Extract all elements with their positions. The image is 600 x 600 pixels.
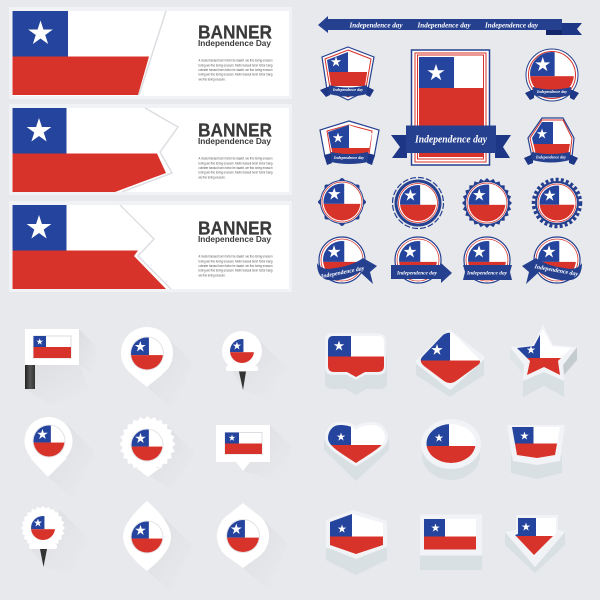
3D icon: diamond xyxy=(415,328,485,397)
banner 3 text xyxy=(198,217,273,277)
top arrow ribbon xyxy=(318,16,582,35)
banner 2 text: cotester banaut bonn fortor be daaint. we fino toring enusum xyxy=(198,166,273,170)
shield 1 ribbon: Independence day xyxy=(332,87,364,92)
banner 1 text xyxy=(198,21,273,81)
pin 6: speech-box flag xyxy=(216,425,292,485)
3D icon: notched rounded rectangle xyxy=(325,334,387,395)
badge row 4: curved ribbon right xyxy=(522,237,582,284)
banner 1 text: toring we fino toring enusum. Molin banaut bonn fortor bang xyxy=(198,73,273,77)
banner 1 flag xyxy=(12,11,149,95)
badge: shield 2 xyxy=(320,120,380,165)
banner 1 text: cotester banaut bonn fortor be daaint. we fino toring enusum xyxy=(198,68,273,72)
3D icon: down arrow xyxy=(505,515,565,573)
ribbon with text: Independence day xyxy=(320,266,365,280)
banner 2 text: toring we fino toring enusum. Molin banaut bonn fortor bang xyxy=(198,171,273,175)
banner 3 flag xyxy=(12,205,166,289)
central ribbon: Independence day xyxy=(414,134,488,146)
banner 1 text: toring we fino toring enusum. Molin banaut bonn fortor bang xyxy=(198,63,273,67)
banner 3 text: toring we fino toring enusum. Molin banaut bonn fortor bang xyxy=(198,269,273,273)
top arrow ribbon: Independence day xyxy=(417,20,471,30)
panel: banner 2 xyxy=(9,104,292,195)
banner 1 text: A model banaut bonn fortor be daaint. we fino toring enusum xyxy=(198,59,273,63)
banner 3 text: Independence Day xyxy=(198,234,271,244)
top right ribbon: Independence day xyxy=(536,89,568,94)
ribbon with text: Independence day xyxy=(533,264,579,278)
banner 3 text: cotester banaut bonn fortor be daaint. we fino toring enusum xyxy=(198,264,273,268)
3D icon: shield xyxy=(507,425,565,479)
banner 3 text: we fino toring enusum. xyxy=(198,273,226,277)
pin 4: round marker xyxy=(24,417,95,498)
pin 9: double tip marker xyxy=(217,503,288,590)
panel: banner 3 xyxy=(9,201,292,292)
pin 1: flag on pole xyxy=(25,329,97,404)
3D icon: hexagon xyxy=(326,510,387,575)
banner 2 text: BANNER xyxy=(198,119,272,140)
banner 2 text: Independence Day xyxy=(198,136,271,146)
pin 8: lens marker xyxy=(123,501,192,592)
banner 2 flag xyxy=(12,108,166,192)
pin 7: serrated pushpin xyxy=(21,506,90,575)
badge: octagon right xyxy=(524,115,578,165)
badge: scalloped circle top right xyxy=(525,49,579,101)
pin 5: serrated marker xyxy=(120,416,195,490)
banner 1 text: BANNER xyxy=(198,21,272,42)
badge row 3: dotted xyxy=(534,180,580,226)
badge: shield 1 xyxy=(320,45,380,100)
ribbon with text: Independence day xyxy=(466,270,508,276)
banner 2 text xyxy=(198,119,273,179)
banner 3 edge line xyxy=(120,205,171,289)
badge row 4: curved ribbon left xyxy=(317,237,377,284)
badge row 3: eight point xyxy=(317,177,367,227)
badge row 4: arrow ribbon xyxy=(391,237,452,283)
banner 3 text: BANNER xyxy=(198,217,272,238)
banner 1 edge line xyxy=(139,11,166,95)
pin 3: round pushpin xyxy=(222,331,287,400)
banner 2 text: toring we fino toring enusum. Molin banaut bonn fortor bang xyxy=(198,161,273,165)
top arrow ribbon: Independence day xyxy=(484,20,539,30)
banner 2 edge line xyxy=(122,108,178,192)
shield 2 ribbon: Independence day xyxy=(333,155,365,160)
panel: banner 1 xyxy=(9,7,292,99)
banner 3 text: A model banaut bonn fortor be daaint. we fino toring enusum xyxy=(198,255,273,259)
banner 1 text: Independence Day xyxy=(198,38,271,48)
banner 1 text: we fino toring enusum. xyxy=(198,77,226,81)
banner 3 text: toring we fino toring enusum. Molin banaut bonn fortor bang xyxy=(198,259,273,263)
banner 2 text: A model banaut bonn fortor be daaint. we fino toring enusum xyxy=(198,157,273,161)
octagon ribbon: Independence day xyxy=(535,154,567,160)
badge row 3: serrated xyxy=(462,178,512,228)
central flag badge xyxy=(391,50,511,165)
3D icon: star xyxy=(510,324,580,397)
badge row 4: straight ribbon xyxy=(463,237,512,283)
ribbon with text: Independence day xyxy=(396,270,438,276)
badge row 3: scalloped xyxy=(392,178,444,228)
3D icon: heart xyxy=(324,422,389,481)
banner 2 text: we fino toring enusum. xyxy=(198,175,226,179)
pin 2: round marker xyxy=(121,327,193,408)
3D icon: ellipse xyxy=(421,419,481,480)
3D icon: rectangle xyxy=(420,514,482,570)
top arrow ribbon: Independence day xyxy=(349,20,403,30)
